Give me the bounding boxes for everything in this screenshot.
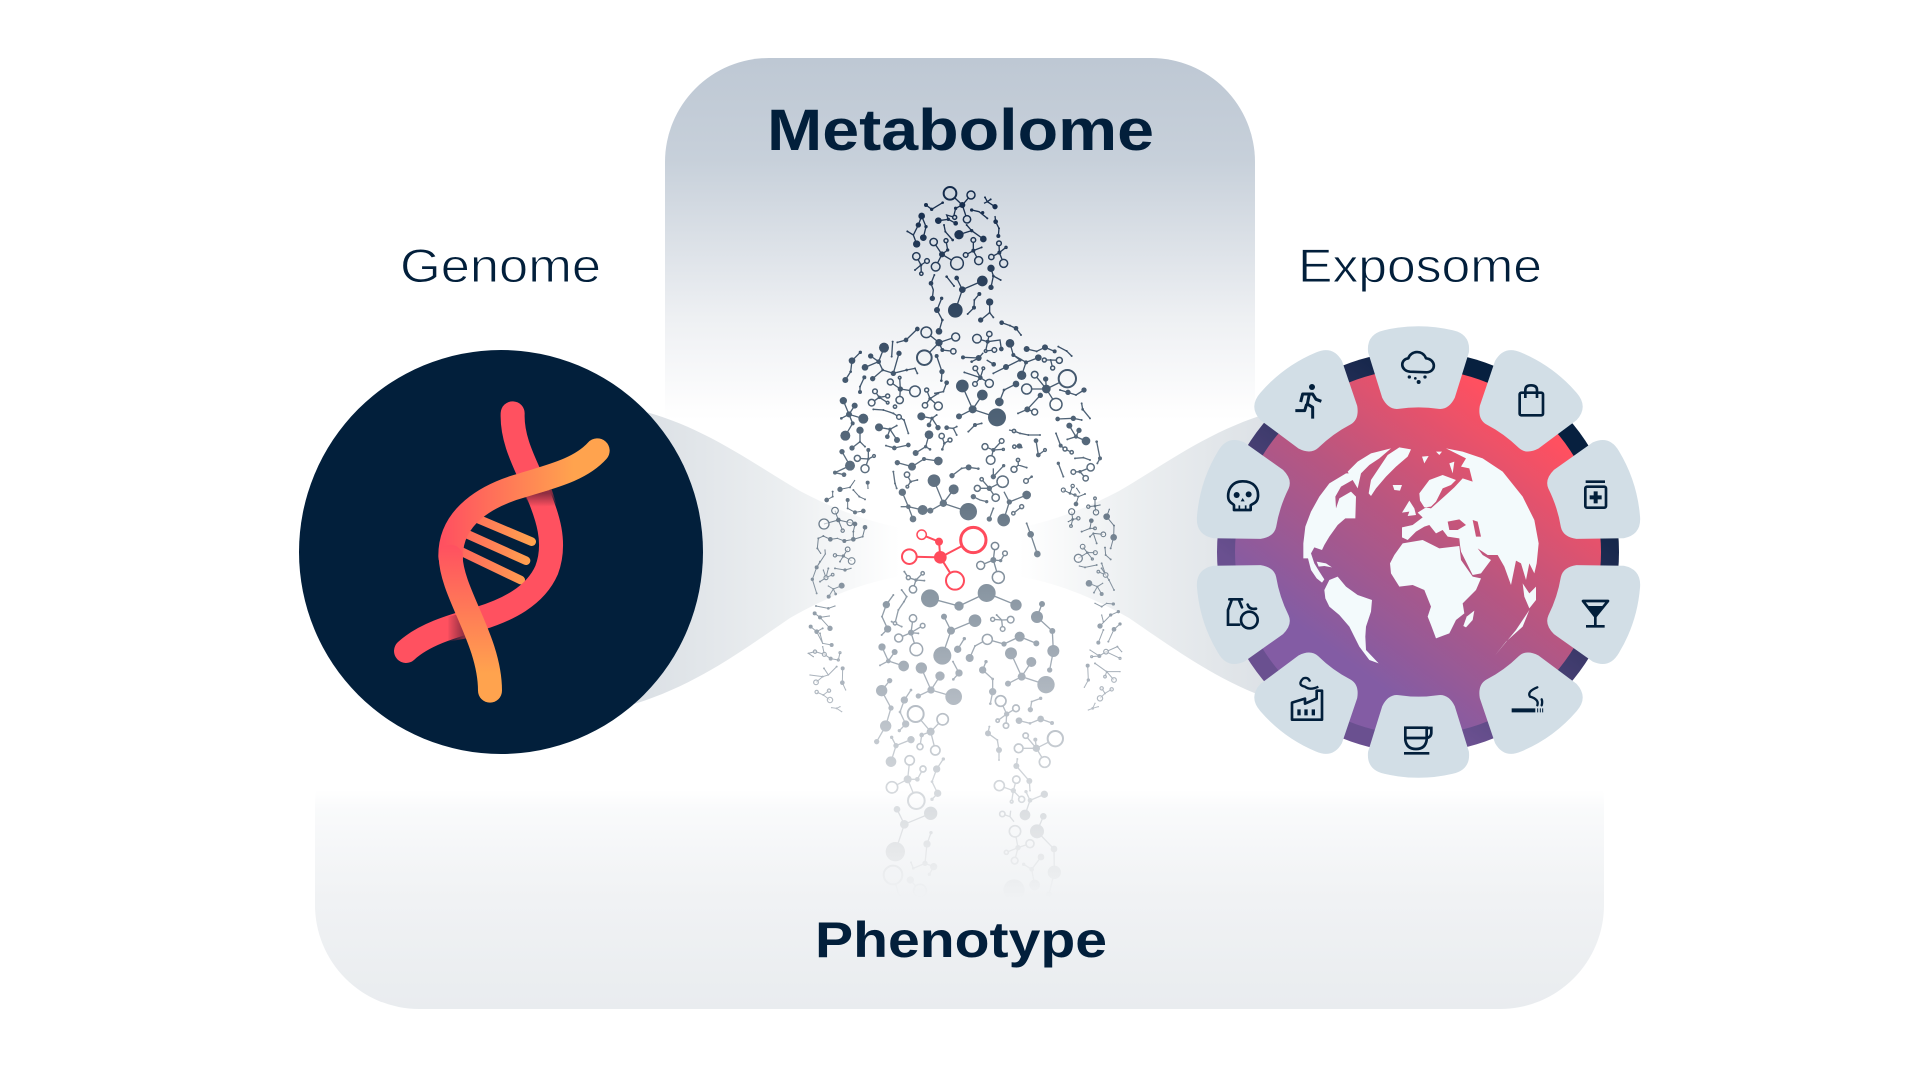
- exposome wheel: [1188, 326, 1649, 778]
- icon: coffee cup: [1404, 728, 1431, 753]
- icon: running person: [1295, 384, 1321, 419]
- icon: DNA double helix: [406, 413, 597, 691]
- panel: metabolome: [665, 58, 1255, 420]
- human body made of molecule network: [833, 187, 1102, 901]
- body: neck: [929, 265, 1022, 336]
- globe continents: [1303, 447, 1539, 663]
- heading: Exposome: Exposome: [1298, 239, 1542, 292]
- body: head: [906, 187, 1008, 275]
- panel: phenotype: [315, 700, 1604, 1009]
- body: shoulders and chest: [840, 327, 1102, 464]
- genome circle with DNA: [299, 350, 703, 754]
- body: belly and upper arms: [833, 448, 1094, 557]
- icon: bottle and apple: [1228, 599, 1258, 628]
- DNA strand: gradient lower: [451, 557, 490, 691]
- funnel: genome to body: [620, 408, 910, 708]
- lower body: [874, 527, 1063, 901]
- DNA strand: gradient upper: [451, 451, 597, 557]
- body: left leg: [874, 662, 962, 898]
- funnel: exposome to body: [1009, 408, 1299, 708]
- body: left forearm and hand: [808, 480, 870, 712]
- DNA shadows: [448, 489, 557, 642]
- DNA rungs: [462, 518, 532, 580]
- icon: shopping bag: [1520, 385, 1543, 415]
- heading: Phenotype: Phenotype: [815, 912, 1107, 968]
- icon tiles: [1188, 326, 1649, 778]
- body: abdomen and hips: [878, 542, 1059, 705]
- body: right forearm and hand: [1061, 484, 1122, 711]
- icon: cigarette: [1512, 687, 1543, 712]
- body: right leg: [985, 696, 1063, 901]
- gradient disc and outer band: [1217, 351, 1619, 753]
- heading: Genome: Genome: [400, 239, 601, 292]
- heading: Metabolome: Metabolome: [767, 98, 1154, 163]
- icon: cocktail glass: [1583, 601, 1608, 626]
- icon: skull: [1228, 481, 1258, 510]
- icon: medicine bottle: [1585, 482, 1606, 508]
- dark circle: [299, 350, 703, 754]
- icon: cloud with snow: [1402, 352, 1434, 384]
- icon: factory with smoke: [1292, 678, 1322, 720]
- highlighted red metabolite molecule: [902, 527, 986, 590]
- DNA strand: red: [406, 413, 551, 651]
